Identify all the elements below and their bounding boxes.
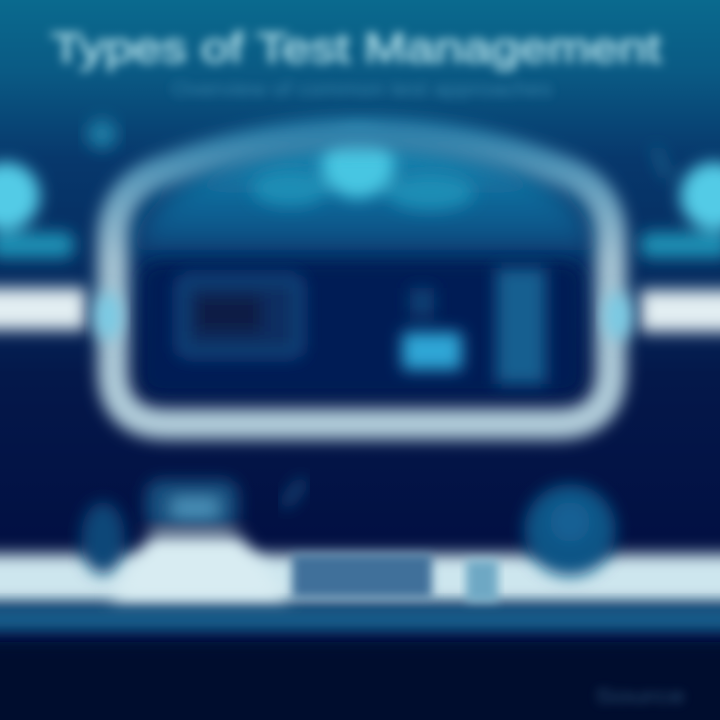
- screen left chart: [180, 278, 300, 354]
- central device panel: [94, 130, 632, 424]
- icon: left small circle: [81, 502, 125, 574]
- icon: person with base: [110, 480, 290, 600]
- title: Types of Test Management: [51, 24, 661, 71]
- bottom teal strip: [0, 606, 720, 632]
- icon: right cloud: [640, 148, 720, 258]
- screen highlighted block: [402, 288, 462, 370]
- centre bottom bar: [292, 554, 432, 598]
- device top glow: [130, 135, 600, 250]
- small mark: [284, 480, 304, 506]
- footer label: Source: [595, 686, 685, 708]
- icon: right circle: [524, 484, 616, 576]
- screen right column: [496, 268, 546, 384]
- bottom dark footer: [0, 642, 720, 720]
- device screen: [140, 262, 584, 396]
- right connector glow: [604, 292, 632, 340]
- small column: [466, 560, 498, 602]
- icon: left cloud: [0, 162, 74, 258]
- icon: small glow upper left: [87, 119, 117, 149]
- device outer frame: [113, 134, 611, 424]
- left horizontal band: [0, 288, 86, 330]
- subtitle: Overview of common test approaches: [172, 79, 552, 101]
- left connector glow: [94, 292, 122, 340]
- device cloud highlight: [252, 130, 474, 210]
- right horizontal band: [640, 290, 720, 332]
- bottom band: [0, 554, 720, 604]
